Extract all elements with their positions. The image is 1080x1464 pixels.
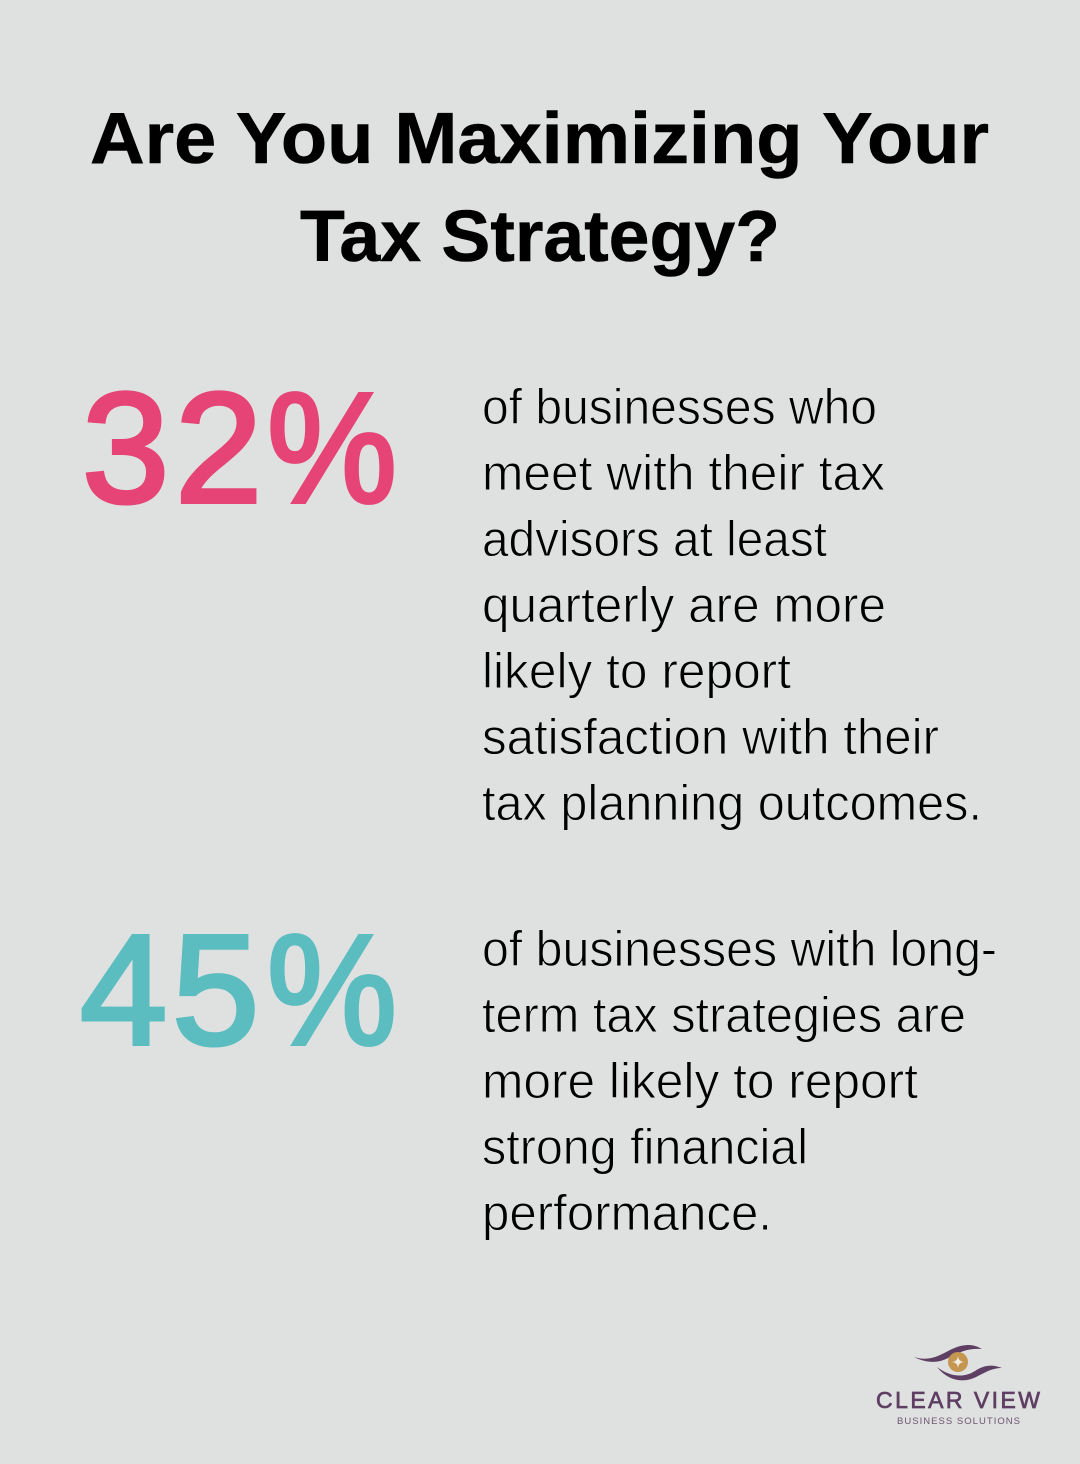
text block: 32% description: satisfaction with their xyxy=(482,709,939,765)
statistic: 32%: % xyxy=(267,361,397,536)
logo wordmark: CLEAR VIEW xyxy=(876,1387,1040,1413)
statistic: 45% xyxy=(80,903,397,1078)
statistic: 32% xyxy=(82,361,397,536)
text block: 32% description: advisors at least xyxy=(482,511,827,567)
statistic: 32%: 32 xyxy=(82,361,262,536)
text block: 45% description: performance. xyxy=(482,1185,772,1241)
text block: 45% description: of businesses with long- xyxy=(482,921,997,977)
title xyxy=(90,99,989,277)
title: Tax Strategy? xyxy=(300,197,780,277)
text block: 32% description: of businesses who xyxy=(482,379,877,435)
icon: gold circle with star xyxy=(948,1352,968,1372)
text block: 45% description: more likely to report xyxy=(482,1053,918,1109)
text block: 32% description: tax planning outcomes. xyxy=(482,775,982,831)
icon: eye lower stroke xyxy=(937,1366,1002,1380)
text block: 32% description xyxy=(482,379,982,831)
text block: 45% description: strong financial xyxy=(482,1119,808,1175)
logo: Clear View Business Solutions xyxy=(876,1345,1040,1427)
title: Are You Maximizing Your xyxy=(90,99,989,179)
text block: 32% description: meet with their tax xyxy=(482,445,885,501)
logo tagline: BUSINESS SOLUTIONS xyxy=(897,1416,1020,1427)
text block: 32% description: quarterly are more xyxy=(482,577,886,633)
text block: 45% description: term tax strategies are xyxy=(482,987,966,1043)
text block: 32% description: likely to report xyxy=(482,643,791,699)
statistic: 45%: 45 xyxy=(80,903,259,1078)
statistic: 45%: % xyxy=(267,903,397,1078)
text block: 45% description xyxy=(482,921,997,1241)
icon: eye upper stroke xyxy=(914,1345,982,1362)
